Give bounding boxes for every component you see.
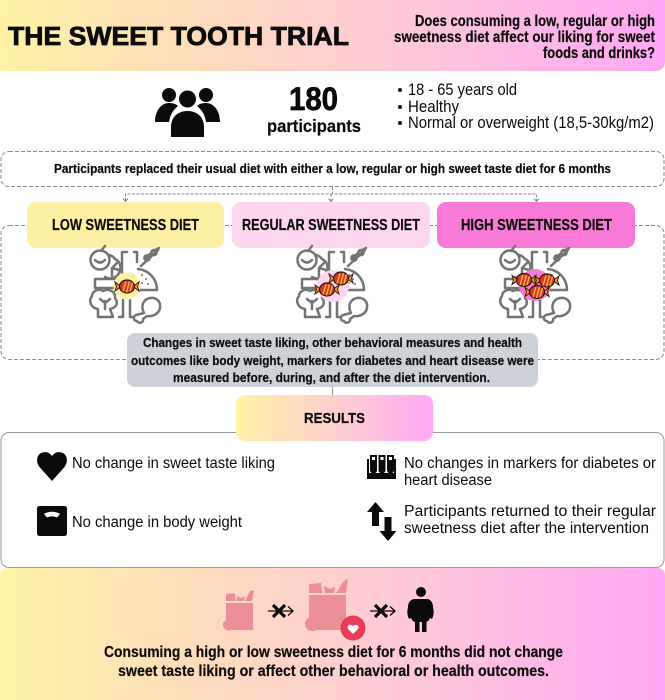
result: markers: [367, 455, 656, 489]
participant criteria list: 18 - 65 years old: [408, 81, 517, 99]
icon: heart: [37, 452, 67, 481]
icon: small grocery bag: [223, 590, 254, 630]
participant criteria list: Healthy: [408, 98, 460, 116]
icon: up and down arrows: [367, 502, 396, 541]
label: regular sweetness diet: REGULAR SWEETNESS DIET: [242, 217, 420, 234]
header banner: [0, 0, 665, 71]
result: sweet taste liking: [37, 452, 275, 481]
panel: measurements: measured before, during, and after the diet intervention.: [173, 370, 490, 385]
result: body weight: No change in body weight: [72, 514, 243, 531]
conclusion text: Consuming a high or low sweetness diet for 6 months did not change: [104, 644, 563, 661]
result: sweet taste liking: No change in sweet taste liking: [72, 455, 275, 472]
panel: measurements: Changes in sweet taste liking, other behavioral measures and health: [143, 335, 522, 350]
icon: arrow blocked 2: [370, 605, 395, 617]
result: returned to regular diet: Participants returned to their regular: [404, 503, 656, 520]
panel: measurements: [127, 333, 538, 387]
label: low sweetness diet: [27, 202, 224, 248]
result: markers: No changes in markers for diabetes or: [404, 455, 656, 472]
label: high sweetness diet: HIGH SWEETNESS DIET: [461, 217, 612, 234]
icon: overweight person: [407, 587, 434, 632]
icon: high sweetness food with three candies: [500, 246, 570, 323]
icon: regular sweetness food with two candies: [297, 246, 367, 323]
participant count: [267, 81, 361, 136]
icon: test tubes: [367, 455, 396, 479]
result: returned to regular diet: sweetness diet after the intervention: [404, 520, 649, 537]
title: THE SWEET TOOTH TRIAL: [8, 21, 349, 51]
results label: RESULTS: [304, 411, 365, 427]
participant count: participants: [267, 116, 361, 136]
icon: arrow blocked 1: [268, 605, 293, 617]
result: returned to regular diet: [367, 502, 656, 541]
participant count: 180: [289, 81, 338, 117]
label: low sweetness diet: LOW SWEETNESS DIET: [52, 217, 199, 234]
panel: results: [1, 432, 664, 568]
icon: low sweetness food with one candy: [90, 246, 160, 323]
results label: [236, 395, 433, 441]
arrows: branch to three diets: [123, 187, 539, 202]
panel: intervention description: Participants replaced their usual diet with either a low, regular or high sweet taste diet for 6 months: [54, 161, 611, 176]
panel: measurements: outcomes like body weight, markers for diabetes and heart disease were: [131, 353, 534, 368]
icon: large grocery bag with heart: [305, 578, 366, 640]
result: body weight: [37, 506, 243, 536]
label: high sweetness diet: [437, 202, 635, 248]
icon: participants group: [155, 88, 220, 137]
participant criteria list: [398, 81, 654, 132]
conclusion text: [104, 644, 563, 680]
panel: intervention description: [1, 152, 664, 186]
panel: diet arms dashed frame: [1, 226, 664, 360]
connector: [332, 387, 334, 396]
panel: conclusion: [0, 568, 665, 700]
icon: weighing scale: [37, 506, 67, 536]
research question: [394, 13, 655, 62]
result: markers: heart disease: [404, 472, 492, 489]
conclusion text: sweet taste liking or affect other behavioral or health outcomes.: [118, 663, 549, 680]
label: regular sweetness diet: [232, 202, 430, 248]
